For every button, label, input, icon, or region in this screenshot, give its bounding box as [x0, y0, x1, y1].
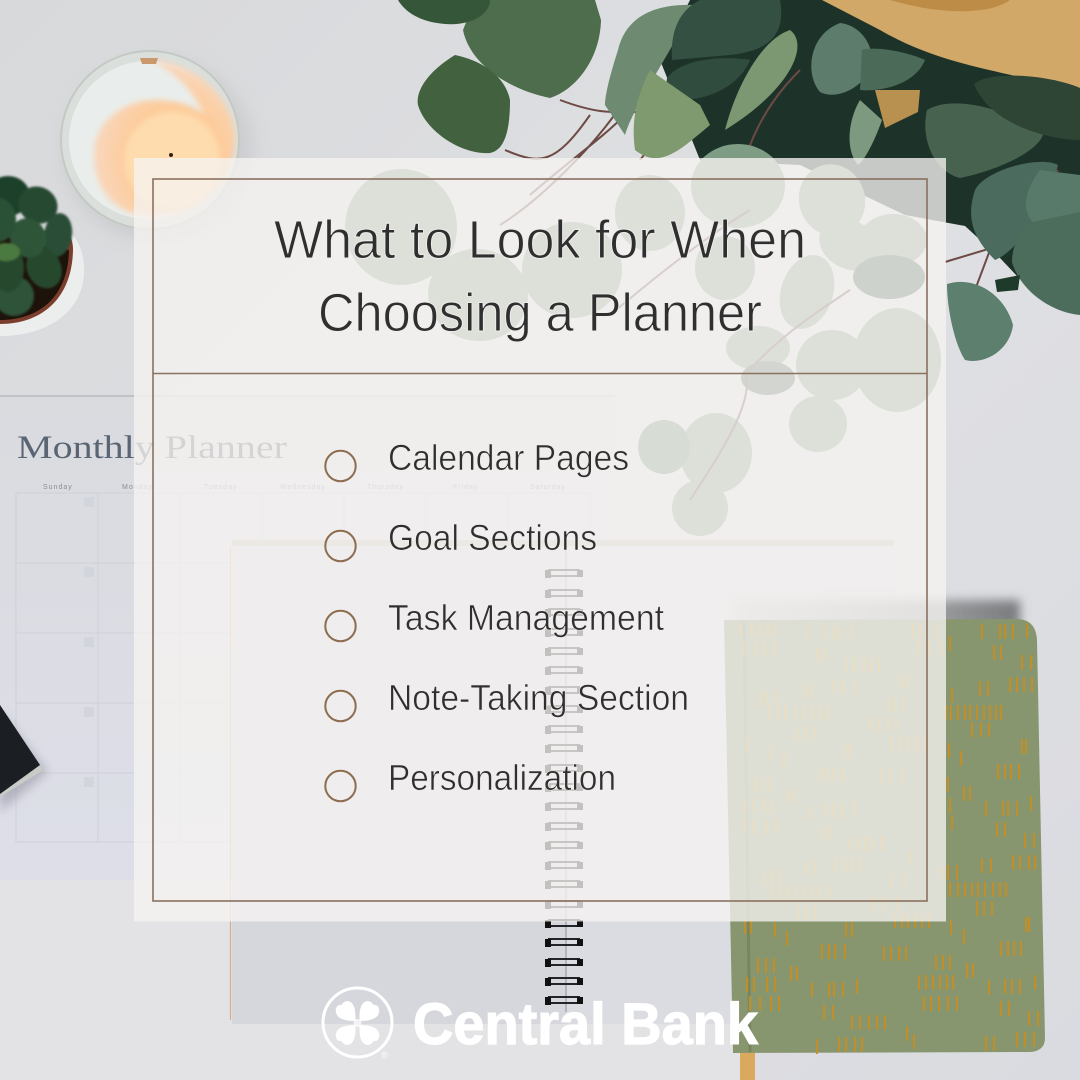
monthly planner sheet: Monthly Planner [17, 430, 287, 466]
icon: dogwood flower in ring [323, 988, 392, 1060]
item: personalization [325, 757, 616, 801]
item: goal sections [325, 517, 597, 561]
eucalyptus foliage and kraft paper [345, 0, 1080, 536]
header divider [153, 372, 927, 374]
item: personalization: Personalization [388, 757, 616, 798]
monthly planner sheet [0, 396, 748, 1080]
candle in glass [61, 51, 254, 242]
item: calendar pages: Calendar Pages [388, 437, 629, 478]
item: calendar pages [325, 437, 629, 481]
monthly planner sheet: Tuesday [204, 484, 238, 491]
dark foliage mass [660, 0, 1080, 310]
leaves beneath the panel [345, 144, 941, 536]
item: task management: Task Management [388, 597, 664, 638]
monthly planner sheet: Thursday [367, 484, 404, 491]
monthly planner sheet: Friday [453, 484, 478, 491]
checklist [325, 437, 689, 801]
green fabric notebook with gold dashes [724, 600, 1045, 1080]
spiral notebook [230, 540, 897, 1024]
icon: dogwood flower in ring: ® [381, 1050, 388, 1060]
translucent panel [134, 158, 946, 922]
panel frame [153, 179, 927, 901]
title: What to Look for When [274, 210, 806, 270]
logo: Central Bank [323, 988, 759, 1060]
monthly planner sheet: Monday [122, 484, 153, 491]
monthly planner sheet: Wednesday [280, 484, 326, 491]
item: note-taking section: Note-Taking Section [388, 677, 689, 718]
succulent in white pot [0, 176, 84, 336]
kraft paper [822, 0, 1080, 88]
monthly planner sheet: Sunday [43, 484, 73, 491]
title: Choosing a Planner [318, 283, 762, 343]
wordmark: Central Bank [413, 992, 759, 1057]
monthly planner sheet: Saturday [530, 484, 566, 491]
black object at left edge [0, 705, 48, 812]
item: goal sections: Goal Sections [388, 517, 597, 558]
stems [500, 70, 1058, 290]
